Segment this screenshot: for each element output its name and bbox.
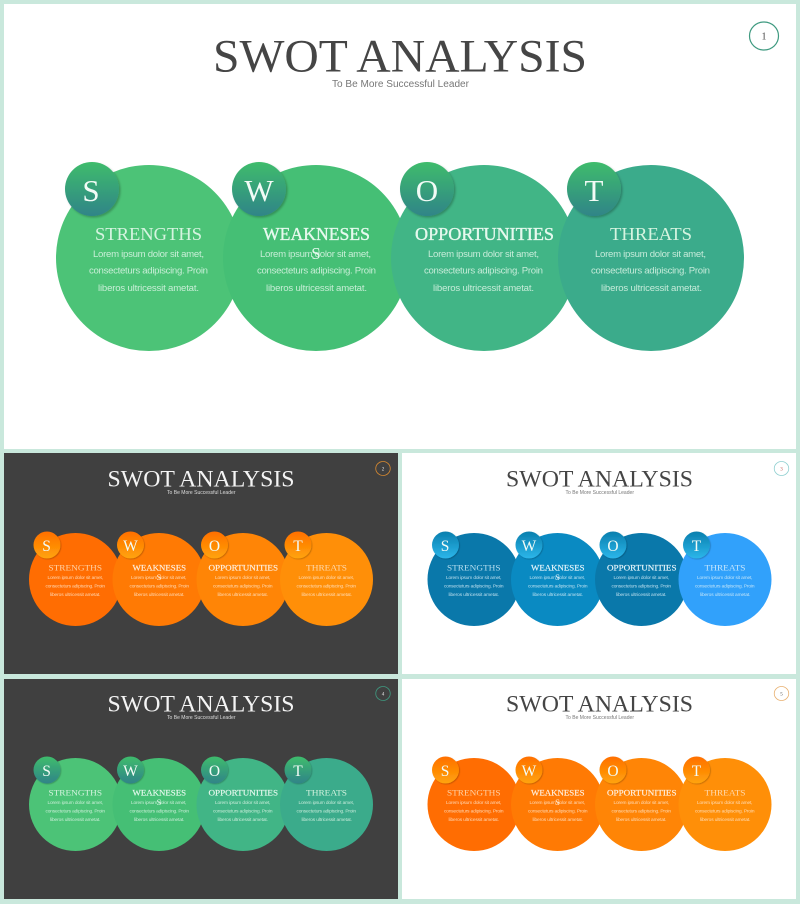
subtitle: To Be More Successful Leader xyxy=(566,715,634,721)
card: threats: THREATS xyxy=(704,562,746,572)
card: weakneses: WEAKNESES xyxy=(132,562,186,572)
card: opportunities: liberos ultricessit ametat. xyxy=(616,592,666,598)
page number badge: 2 xyxy=(382,467,385,472)
card: weakneses xyxy=(223,162,409,351)
card: opportunities: O xyxy=(209,763,220,780)
page number badge xyxy=(774,686,789,700)
card: threats: consecteturs adipiscing. Proin xyxy=(695,583,755,589)
card: opportunities: OPPORTUNITIES xyxy=(607,562,677,572)
card: opportunities: O xyxy=(209,538,220,555)
title: SWOT ANALYSIS xyxy=(506,466,693,492)
card: weakneses: WEAKNESES xyxy=(531,562,585,572)
subtitle: To Be More Successful Leader xyxy=(167,715,236,721)
card: weakneses: S xyxy=(555,797,560,807)
card: strengths: S xyxy=(42,763,51,780)
card: weakneses: consecteturs adipiscing. Proin xyxy=(528,583,588,589)
card: threats: liberos ultricessit ametat. xyxy=(700,817,750,823)
panel: main slide 1 green on white xyxy=(4,4,796,449)
card: strengths: Lorem ipsum dolor sit amet, xyxy=(48,800,103,806)
card: strengths xyxy=(56,162,242,351)
card: weakneses: S xyxy=(311,244,321,263)
card: threats: Lorem ipsum dolor sit amet, xyxy=(298,800,354,806)
card: weakneses: WEAKNESES xyxy=(263,224,370,244)
card: threats: consecteturs adipiscing. Proin xyxy=(296,808,356,814)
card: opportunities: Lorem ipsum dolor sit amet, xyxy=(215,800,270,806)
card: weakneses: W xyxy=(123,538,138,555)
card: strengths: consecteturs adipiscing. Proin xyxy=(444,808,504,814)
card: opportunities: O xyxy=(607,538,619,555)
card: strengths: S xyxy=(441,763,449,780)
card: opportunities: Lorem ipsum dolor sit amet, xyxy=(614,575,669,581)
card: opportunities: consecteturs adipiscing. Proin xyxy=(424,266,543,276)
page number badge: 3 xyxy=(780,467,783,472)
card: weakneses: Lorem ipsum dolor sit amet, xyxy=(530,575,585,581)
card: strengths: Lorem ipsum dolor sit amet, xyxy=(93,249,204,260)
page number badge: 1 xyxy=(762,32,766,42)
card: strengths: STRENGTHS xyxy=(95,224,202,244)
card: weakneses: Lorem ipsum dolor sit amet, xyxy=(131,800,186,806)
card: weakneses: Lorem ipsum dolor sit amet, xyxy=(260,249,371,260)
card: strengths: STRENGTHS xyxy=(447,788,501,798)
card: opportunities: OPPORTUNITIES xyxy=(208,562,278,572)
card: weakneses: S xyxy=(157,572,162,582)
card: weakneses: S xyxy=(157,797,162,807)
card: opportunities: consecteturs adipiscing. Proin xyxy=(612,808,671,814)
panel: slide 3 blue on white xyxy=(402,453,796,674)
card: weakneses: consecteturs adipiscing. Proin xyxy=(130,808,189,814)
card: threats: T xyxy=(585,173,604,208)
card: weakneses xyxy=(511,532,604,626)
card: opportunities: consecteturs adipiscing. Proin xyxy=(213,808,273,814)
card: strengths: Lorem ipsum dolor sit amet, xyxy=(446,575,502,581)
card: threats: THREATS xyxy=(704,788,746,798)
card: strengths: S xyxy=(42,538,51,555)
card: strengths: STRENGTHS xyxy=(48,788,102,798)
card: weakneses: consecteturs adipiscing. Proin xyxy=(528,808,588,814)
card: weakneses: consecteturs adipiscing. Proin xyxy=(130,583,189,589)
card: threats: T xyxy=(692,538,702,555)
card: opportunities: consecteturs adipiscing. Proin xyxy=(213,583,273,589)
card: opportunities: OPPORTUNITIES xyxy=(607,788,677,798)
card: opportunities: OPPORTUNITIES xyxy=(415,224,554,244)
card: threats xyxy=(678,756,772,851)
card: opportunities: OPPORTUNITIES xyxy=(208,788,278,798)
card: threats: T xyxy=(293,538,303,555)
card: strengths: liberos ultricessit ametat. xyxy=(50,817,100,823)
card: threats: Lorem ipsum dolor sit amet, xyxy=(298,575,354,581)
card: weakneses: liberos ultricessit ametat. xyxy=(134,592,184,598)
page number badge: 5 xyxy=(780,692,783,697)
card: weakneses: S xyxy=(555,572,560,582)
card: threats xyxy=(280,756,373,851)
card: opportunities: O xyxy=(607,763,619,780)
card: threats xyxy=(558,162,744,351)
card: weakneses: W xyxy=(522,538,537,555)
subtitle: To Be More Successful Leader xyxy=(566,490,634,496)
page number badge xyxy=(750,22,778,50)
card: strengths: consecteturs adipiscing. Proin xyxy=(89,266,208,276)
card: threats: Lorem ipsum dolor sit amet, xyxy=(697,800,752,806)
card: strengths xyxy=(428,532,520,626)
page number badge: 4 xyxy=(382,692,385,697)
page number badge xyxy=(376,686,390,700)
card: weakneses: consecteturs adipiscing. Proin xyxy=(257,266,376,276)
card: weakneses: liberos ultricessit ametat. xyxy=(532,817,583,823)
card: weakneses: W xyxy=(522,763,537,780)
card: weakneses: WEAKNESES xyxy=(132,788,186,798)
card: threats: consecteturs adipiscing. Proin xyxy=(296,583,356,589)
card: weakneses: Lorem ipsum dolor sit amet, xyxy=(131,575,186,581)
title: SWOT ANALYSIS xyxy=(108,466,294,492)
card: weakneses xyxy=(112,532,206,626)
card: strengths xyxy=(29,532,122,626)
card: opportunities: Lorem ipsum dolor sit amet, xyxy=(428,249,539,260)
title: SWOT ANALYSIS xyxy=(213,30,587,82)
card: threats: THREATS xyxy=(610,224,692,244)
card: opportunities: liberos ultricessit ametat. xyxy=(616,817,666,823)
card: strengths: liberos ultricessit ametat. xyxy=(50,592,100,598)
card: weakneses: liberos ultricessit ametat. xyxy=(532,592,583,598)
card: weakneses: W xyxy=(123,763,138,780)
card: threats: T xyxy=(692,763,702,780)
page number badge xyxy=(376,462,390,476)
card: strengths xyxy=(29,756,122,851)
card: opportunities xyxy=(391,162,577,351)
card: opportunities xyxy=(196,532,290,626)
card: strengths: consecteturs adipiscing. Proin xyxy=(444,583,504,589)
card: opportunities xyxy=(595,756,688,851)
card: threats: Lorem ipsum dolor sit amet, xyxy=(697,575,752,581)
title: SWOT ANALYSIS xyxy=(108,691,294,717)
card: strengths: S xyxy=(441,538,449,555)
subtitle: To Be More Successful Leader xyxy=(167,490,236,496)
card: strengths: liberos ultricessit ametat. xyxy=(448,592,499,598)
card: opportunities: liberos ultricessit ametat. xyxy=(218,592,268,598)
card: opportunities: liberos ultricessit ametat. xyxy=(433,283,534,294)
card: weakneses: Lorem ipsum dolor sit amet, xyxy=(530,800,585,806)
card: threats: THREATS xyxy=(306,562,347,572)
card: weakneses xyxy=(511,756,604,851)
card: threats xyxy=(280,532,373,626)
card: strengths: liberos ultricessit ametat. xyxy=(98,283,199,294)
card: weakneses: WEAKNESES xyxy=(531,788,585,798)
card: threats: consecteturs adipiscing. Proin xyxy=(591,266,710,276)
card: opportunities: Lorem ipsum dolor sit amet, xyxy=(215,575,270,581)
card: strengths: S xyxy=(82,173,100,208)
card: strengths: Lorem ipsum dolor sit amet, xyxy=(446,800,502,806)
card: strengths: STRENGTHS xyxy=(48,562,102,572)
card: threats: T xyxy=(293,763,303,780)
card: threats xyxy=(678,532,772,626)
card: threats: liberos ultricessit ametat. xyxy=(601,283,702,294)
card: strengths: consecteturs adipiscing. Proin xyxy=(46,808,105,814)
card: threats: liberos ultricessit ametat. xyxy=(302,817,352,823)
panel: slide 4 green on dark xyxy=(4,679,398,899)
card: opportunities xyxy=(595,532,688,626)
card: weakneses: W xyxy=(244,173,274,208)
card: opportunities: liberos ultricessit ametat. xyxy=(218,817,268,823)
card: threats: consecteturs adipiscing. Proin xyxy=(695,808,755,814)
card: weakneses xyxy=(112,756,206,851)
card: strengths: Lorem ipsum dolor sit amet, xyxy=(48,575,103,581)
card: opportunities: O xyxy=(416,173,438,208)
subtitle: To Be More Successful Leader xyxy=(332,79,470,90)
card: strengths: STRENGTHS xyxy=(447,562,501,572)
card: strengths xyxy=(428,756,520,851)
page number badge xyxy=(774,462,789,476)
card: threats: Lorem ipsum dolor sit amet, xyxy=(595,249,706,260)
card: strengths: liberos ultricessit ametat. xyxy=(448,817,499,823)
card: strengths: consecteturs adipiscing. Proin xyxy=(46,583,105,589)
card: threats: liberos ultricessit ametat. xyxy=(302,592,352,598)
card: opportunities xyxy=(196,756,290,851)
title: SWOT ANALYSIS xyxy=(506,691,693,717)
card: threats: THREATS xyxy=(306,788,347,798)
card: opportunities: Lorem ipsum dolor sit amet, xyxy=(614,800,669,806)
card: weakneses: liberos ultricessit ametat. xyxy=(134,817,184,823)
panel: slide 2 orange on dark xyxy=(4,453,398,674)
card: weakneses: liberos ultricessit ametat. xyxy=(266,283,367,294)
panel: slide 5 orange on white xyxy=(402,679,796,899)
card: threats: liberos ultricessit ametat. xyxy=(700,592,750,598)
card: opportunities: consecteturs adipiscing. Proin xyxy=(612,583,671,589)
